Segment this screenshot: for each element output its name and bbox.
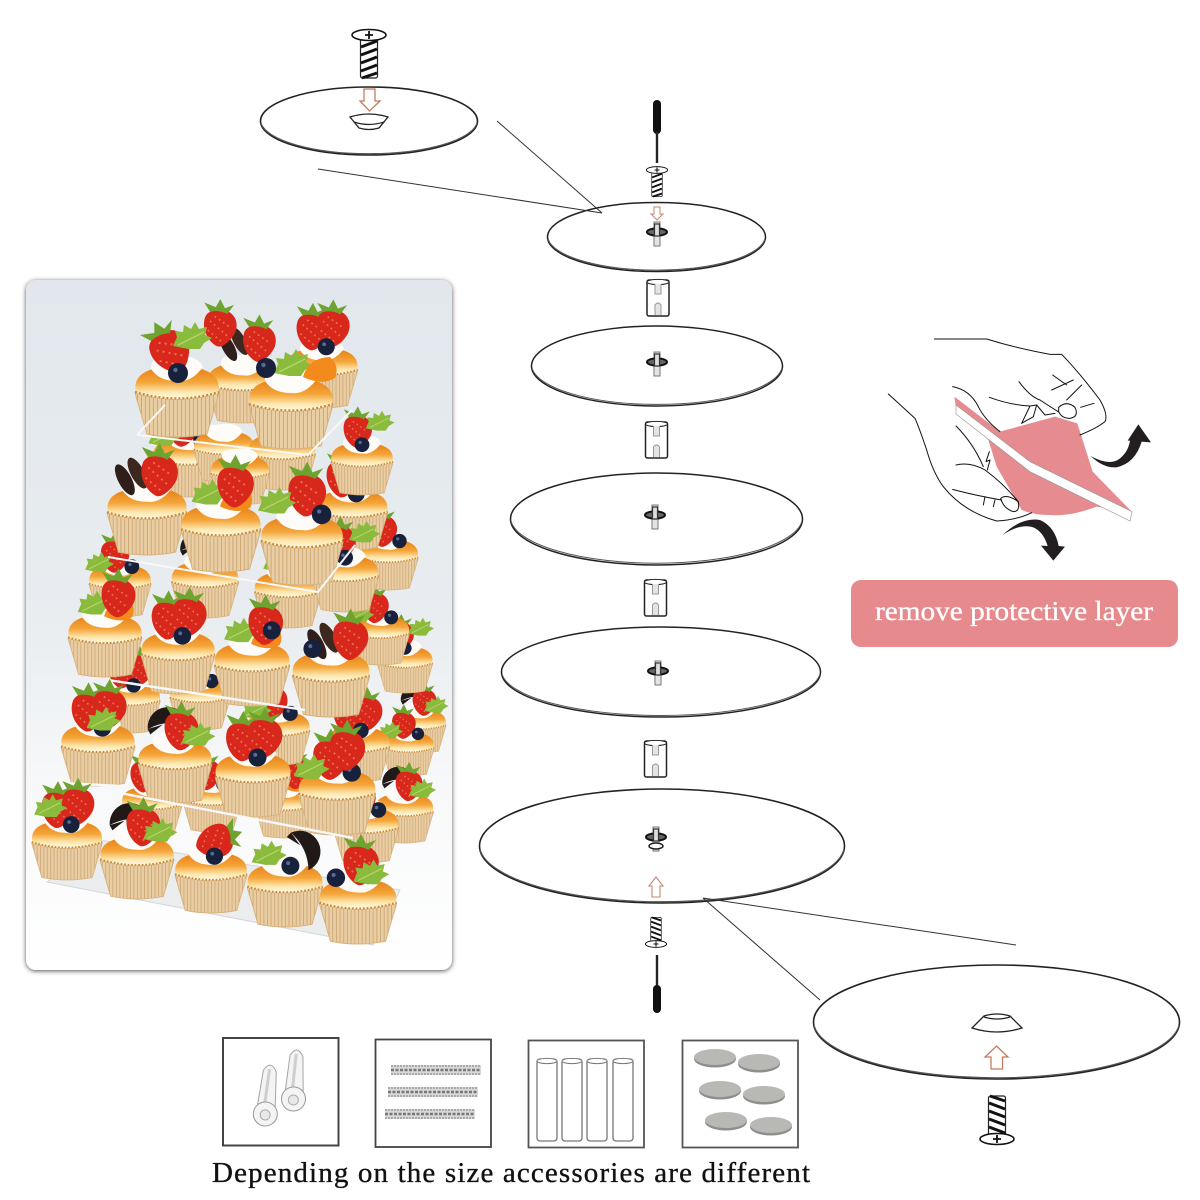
bottom callout disc with screw — [814, 965, 1180, 1144]
icon: fastener — [648, 661, 668, 685]
acrylic plate tier 2 — [108, 545, 355, 592]
tier disc 2 — [532, 326, 782, 406]
arrow: down right — [1003, 519, 1065, 561]
connector line: top callout — [318, 121, 602, 213]
third tier cupcakes — [68, 568, 370, 717]
tier disc 4 — [502, 627, 820, 717]
spacer 4 — [644, 740, 666, 777]
icon: countersunk hole — [350, 114, 388, 130]
icon: small up arrow — [649, 877, 663, 897]
spacer 3 — [644, 579, 666, 616]
tier disc 1 — [548, 202, 766, 272]
connector line: bottom callout — [703, 898, 1016, 1000]
tier disc 3 — [510, 473, 802, 565]
icon: screw — [980, 1096, 1014, 1144]
icon: small down arrow — [651, 207, 663, 220]
bottom tier cupcakes — [32, 778, 397, 944]
peeling illustration — [888, 339, 1151, 561]
icon: screw — [352, 30, 386, 78]
arrow: up right — [1091, 424, 1151, 467]
icon: fastener — [647, 222, 667, 246]
icon: bottom screw — [645, 917, 667, 947]
accessory box: screws — [223, 1038, 338, 1146]
icon: fastener — [646, 827, 666, 851]
button: remove protective layer: remove protective layer — [875, 596, 1153, 626]
acrylic board edge — [956, 405, 1132, 521]
hands line art — [888, 339, 1106, 521]
icon: fastener — [645, 505, 665, 529]
icon: countersunk cone — [972, 1014, 1022, 1032]
spacer 2 — [646, 421, 668, 458]
accessory box: tubes — [528, 1040, 644, 1148]
icon: orange up arrow — [985, 1046, 1008, 1069]
second tier cupcakes — [107, 443, 343, 585]
acrylic plate tier 1 — [137, 405, 352, 455]
button: remove protective layer — [851, 580, 1178, 647]
icon: orange down arrow — [360, 89, 380, 111]
acrylic plate tier 3 — [108, 680, 305, 710]
top callout disc with screw — [260, 30, 478, 155]
icon: top screw — [646, 167, 668, 197]
icon: top screwdriver — [653, 100, 661, 163]
acrylic plate tier 4 — [62, 783, 353, 838]
icon: fastener — [647, 352, 667, 376]
tier disc 5 (base) — [480, 789, 844, 903]
accessory box: discs — [682, 1040, 798, 1148]
protective layer sheet — [954, 397, 1132, 515]
tower base plate — [47, 840, 400, 945]
spacer 1 — [647, 279, 669, 316]
back row cupcakes — [85, 400, 449, 863]
photo panel: cupcake tower — [26, 280, 452, 970]
accessory box: threaded rods — [376, 1040, 491, 1147]
icon: bottom screwdriver — [653, 955, 661, 1013]
fourth tier cupcakes — [61, 679, 376, 835]
top tier cupcakes — [135, 299, 358, 449]
caption: Depending on the size accessories are different — [212, 1157, 810, 1189]
